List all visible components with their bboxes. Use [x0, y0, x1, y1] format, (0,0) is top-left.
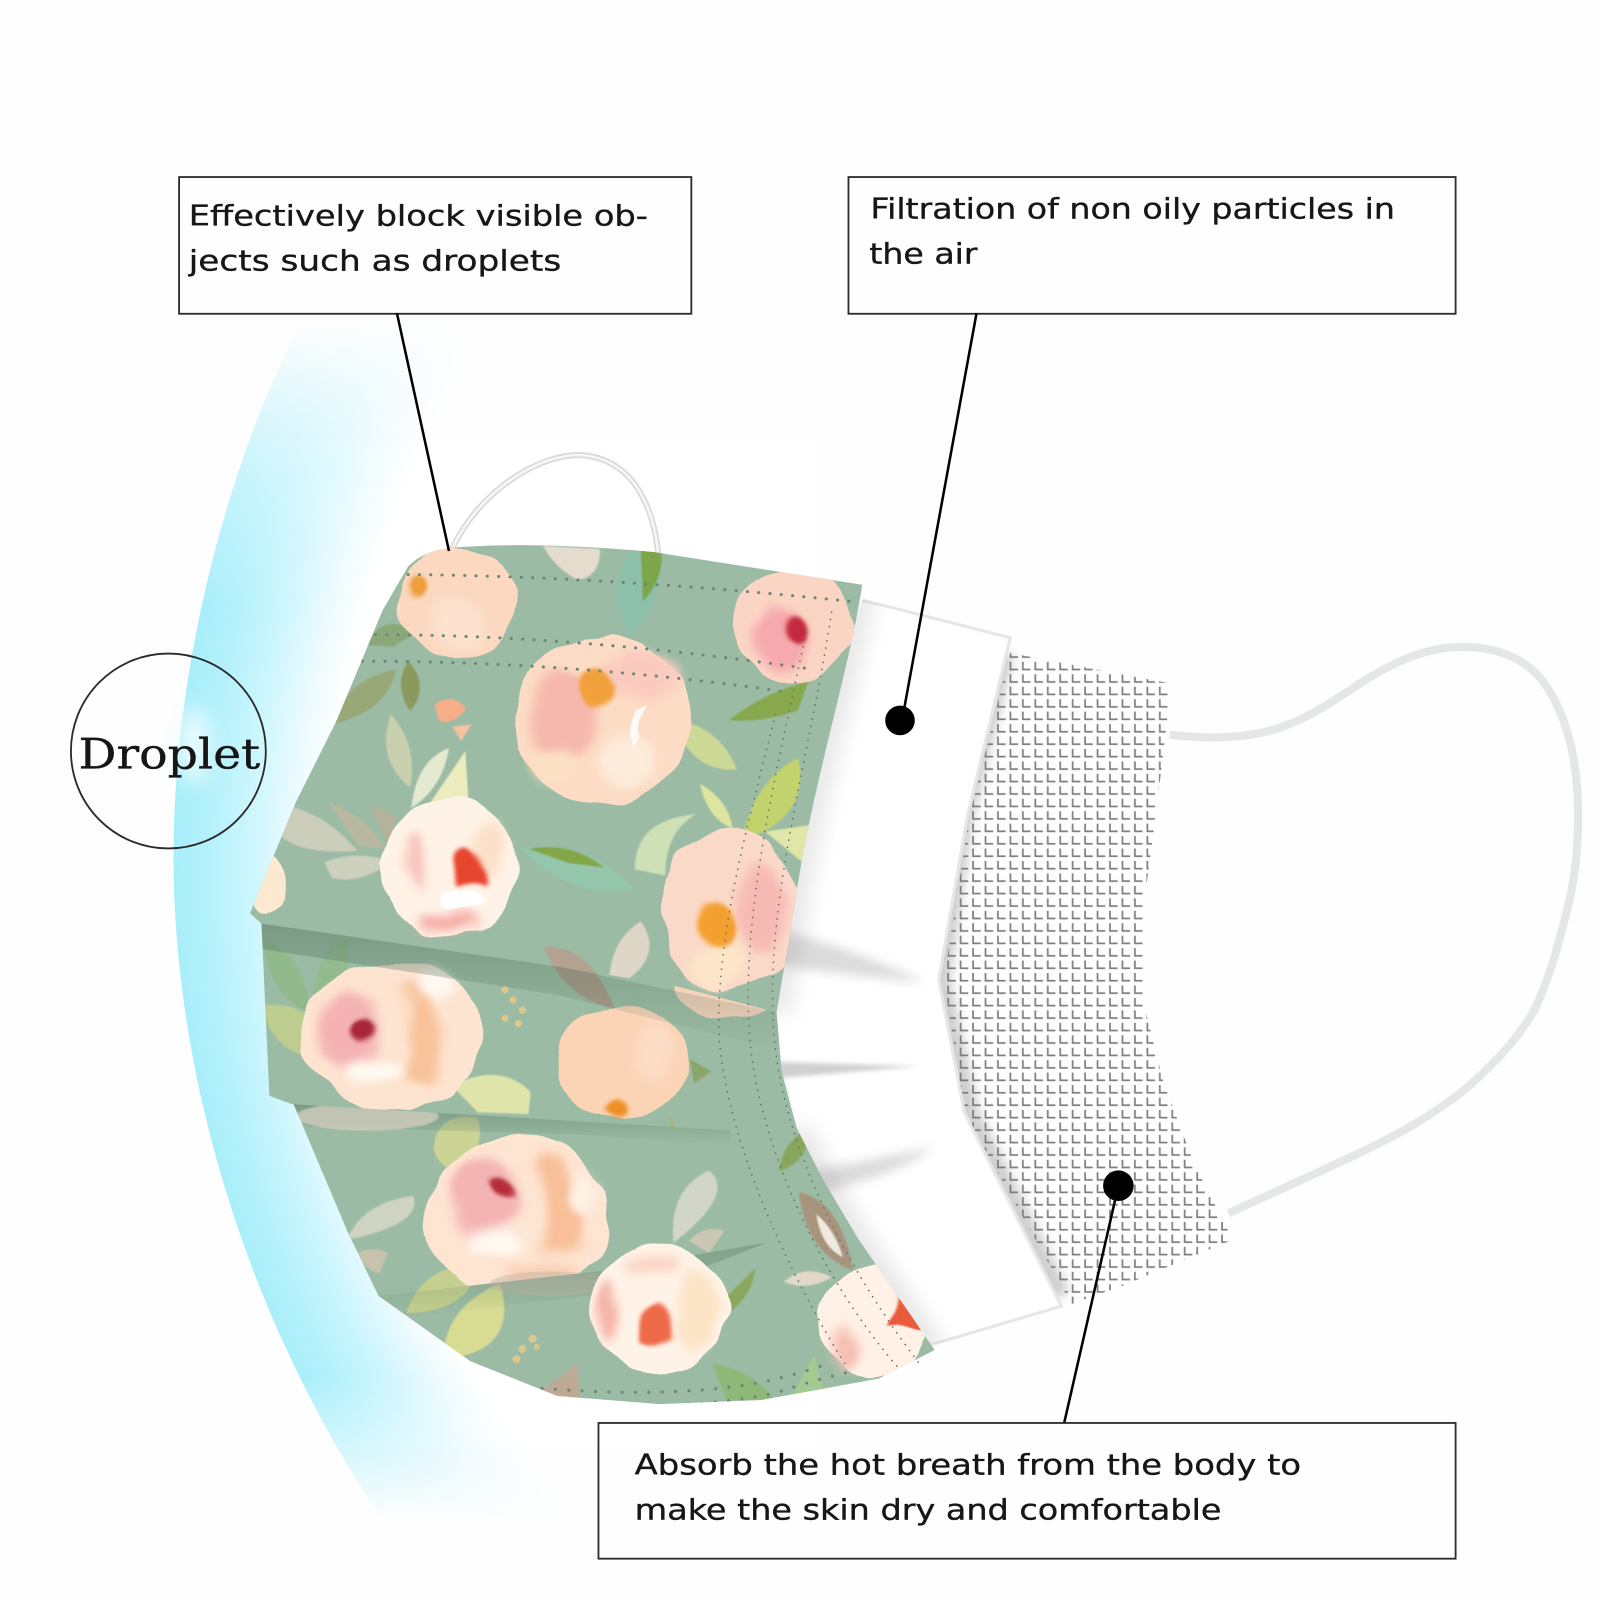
lower part of right rose — [674, 986, 766, 1018]
ghost rose under pleat — [296, 1102, 439, 1131]
inner mesh layer — [941, 653, 1233, 1304]
rose shadow below fold — [490, 1272, 599, 1296]
callout: filtration — [848, 177, 1456, 314]
floral outer layer — [239, 536, 959, 1418]
panel pleat shadows — [784, 930, 916, 984]
right ear loop — [1169, 647, 1578, 1213]
shadow under middle pleat — [294, 1104, 730, 1134]
middle pleat leaves — [264, 935, 712, 1128]
callout: filtration: the air — [869, 236, 978, 270]
callout: block droplets — [179, 177, 691, 314]
side stitching — [719, 612, 918, 1367]
rose: left cream — [382, 799, 516, 936]
rose: middle peach — [558, 1005, 687, 1117]
callout: absorb: make the skin dry and comfortable — [635, 1492, 1221, 1526]
callout: block droplets: Effectively block visible ob- — [189, 199, 648, 233]
leader line and dot: inner layer — [1064, 1170, 1134, 1422]
callout: filtration: Filtration of non oily particles in — [870, 191, 1395, 225]
shadow under top pleat — [262, 924, 777, 1023]
top pleat leaves — [278, 546, 813, 1008]
rose: corner — [818, 1264, 933, 1379]
rose: top right — [735, 567, 853, 682]
rose: middle left — [301, 960, 485, 1111]
white inner panel — [755, 585, 1061, 1350]
droplet haze — [178, 706, 210, 784]
fold line shadow — [390, 1243, 766, 1306]
rose: right orange — [662, 827, 797, 990]
leader line: outer layer — [397, 313, 449, 551]
leader line and dot: middle layer — [885, 313, 977, 735]
rose: lower right — [590, 1244, 727, 1374]
panel shading — [777, 585, 862, 1012]
droplet circle label — [71, 654, 266, 848]
callout: absorb: Absorb the hot breath from the body to — [635, 1447, 1301, 1481]
gold flecks — [512, 1335, 540, 1363]
callout: block droplets: jects such as droplets — [188, 243, 561, 277]
gold flecks — [502, 986, 526, 1027]
bottom pleat leaves — [349, 1116, 854, 1400]
top stitching — [362, 574, 857, 692]
bottom pleat — [294, 1071, 934, 1404]
rose: lower centre — [426, 1137, 609, 1296]
rose: big centre — [514, 636, 690, 803]
rose: far-left sliver — [254, 856, 286, 914]
panel edge — [862, 600, 1061, 1345]
back ear loop — [452, 455, 658, 553]
droplet blue shield arc — [174, 344, 488, 1506]
top pleat — [239, 536, 878, 1026]
rose: top left — [397, 547, 515, 657]
callout: absorb — [598, 1423, 1456, 1559]
middle pleat — [262, 924, 782, 1130]
droplet circle label: Droplet — [79, 729, 260, 778]
bottom stitching — [540, 1364, 847, 1404]
